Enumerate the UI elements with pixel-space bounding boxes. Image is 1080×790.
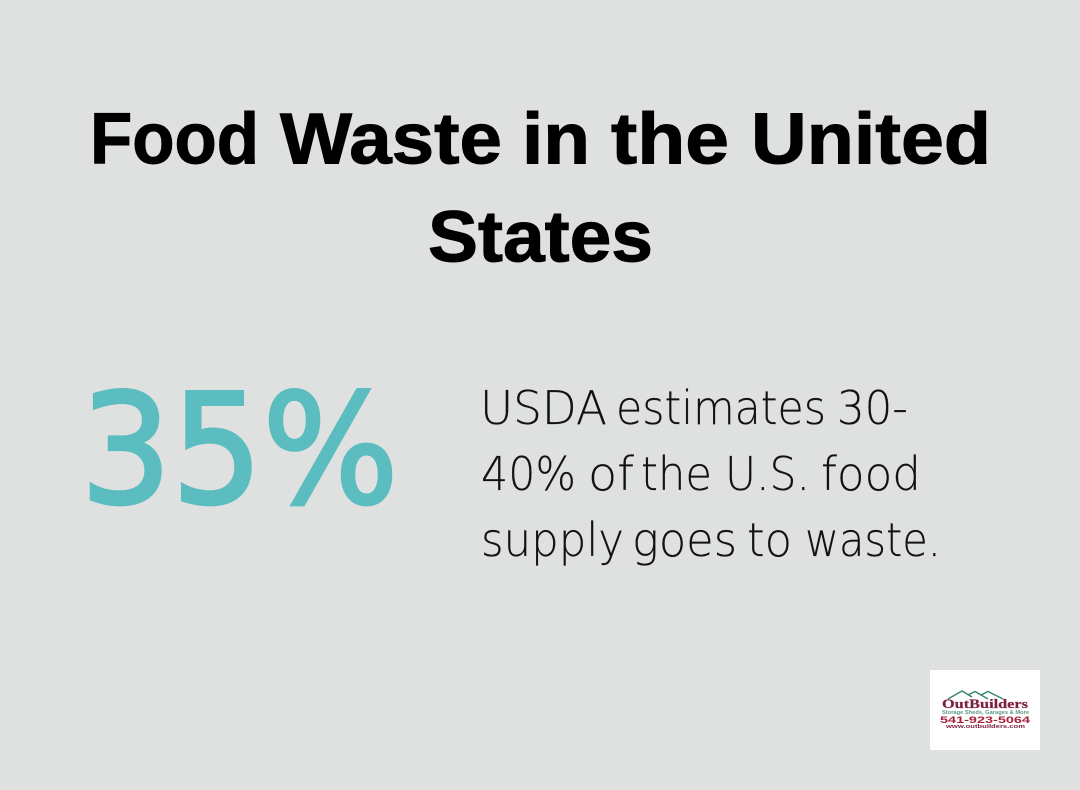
description text (480, 381, 941, 567)
logo tagline: Storage Sheds, Garages & More (942, 710, 1029, 716)
title: the (611, 100, 729, 180)
description text: USDA (480, 381, 607, 435)
logo: OutBuilders (930, 670, 1040, 750)
description text: food (821, 447, 921, 501)
title (90, 100, 991, 278)
description text: waste. (805, 513, 941, 567)
logo phone: 541-923-5064 (940, 715, 1031, 726)
title: United (751, 100, 991, 180)
description text: estimates (616, 381, 826, 435)
logo website: www.outbuilders.com (945, 724, 1025, 730)
description text: U.S. (725, 447, 810, 501)
description text: 30- (837, 381, 908, 435)
description text: the (641, 447, 712, 501)
big statistic: 35%: 35% (80, 362, 398, 538)
logo name: OutBuilders (942, 697, 1028, 711)
title: in (522, 100, 590, 180)
description text: of (588, 447, 635, 501)
description text: to (747, 513, 792, 567)
description text: 40% (481, 447, 576, 501)
description text: supply (481, 513, 624, 567)
description text: goes (632, 513, 737, 567)
title: Waste (280, 100, 502, 180)
title: States (428, 198, 653, 278)
icon: roofline (948, 691, 1003, 699)
title: Food (90, 100, 259, 180)
